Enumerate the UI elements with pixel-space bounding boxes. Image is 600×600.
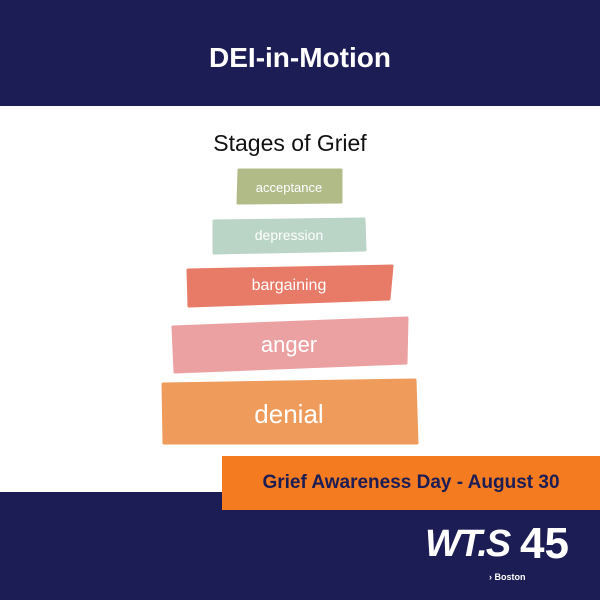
bottom band — [0, 492, 600, 600]
stage: acceptance — [238, 170, 341, 203]
logo: WTS 45 Boston — [425, 519, 569, 582]
stage: bargaining: bargaining — [252, 277, 326, 294]
stage: anger: anger — [261, 332, 317, 357]
top band — [0, 0, 600, 106]
banner: Grief Awareness Day — [222, 456, 600, 510]
stage: denial — [163, 380, 417, 443]
stage: depression: depression — [255, 227, 323, 243]
subtitle: Stages of Grief — [213, 130, 367, 156]
logo: WTS 45 Boston: WT.S — [425, 523, 509, 565]
title: DEI-in-Motion — [209, 42, 391, 73]
logo: WTS 45 Boston: 45 — [520, 519, 569, 568]
banner: Grief Awareness Day: Grief Awareness Day - August 30 — [262, 472, 560, 493]
stage: depression — [214, 219, 365, 253]
stage: denial: denial — [254, 399, 324, 429]
stage: bargaining — [188, 266, 392, 306]
logo: WTS 45 Boston: › Boston — [489, 572, 526, 582]
stage: anger — [173, 318, 407, 372]
stage: acceptance: acceptance — [256, 180, 322, 195]
